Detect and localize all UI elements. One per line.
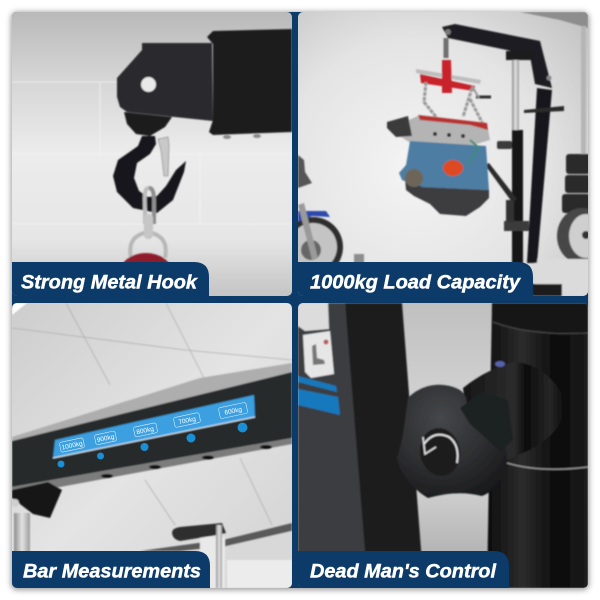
weight markers: 800kg xyxy=(136,426,155,436)
icon: hook and chain xyxy=(444,38,448,58)
icon: lifting chains xyxy=(422,80,484,124)
floor xyxy=(535,259,590,296)
icon: orange cap xyxy=(443,160,463,176)
icon: crane leg base xyxy=(532,284,562,296)
caption: dead man's control: Dead Man's Control xyxy=(310,562,497,582)
weight markers xyxy=(59,402,248,452)
icon: ram cylinder xyxy=(512,130,523,264)
icon: pump knob xyxy=(497,141,512,149)
icon: cross handle xyxy=(524,106,564,113)
weight markers: 900kg xyxy=(96,434,115,444)
icon: knob cap xyxy=(416,425,464,479)
icon: red spreader bar xyxy=(416,69,481,84)
label bar xyxy=(298,551,509,588)
icon: star knob xyxy=(397,385,507,498)
ceiling beam xyxy=(520,12,588,28)
icon: warning stickers xyxy=(298,303,329,331)
icon: latch xyxy=(158,137,169,176)
panel: dead man's control xyxy=(298,303,588,588)
icon: hook xyxy=(113,136,186,213)
icon: blue CE stickers xyxy=(298,376,337,392)
weight markers: 600kg xyxy=(224,406,243,417)
panel: 1000kg load capacity xyxy=(283,12,600,296)
icon: silver post xyxy=(14,513,30,553)
caption: strong metal hook: Strong Metal Hook xyxy=(21,272,198,294)
icon: swivel xyxy=(124,112,172,136)
icon: motorcycle xyxy=(283,217,343,277)
icon: crank handle xyxy=(172,523,226,541)
panel: strong metal hook xyxy=(12,12,292,296)
icon: boom xyxy=(442,24,552,88)
caption: bar measurements: Bar Measurements xyxy=(23,562,201,582)
icon: valve stem xyxy=(463,362,565,460)
panel: bar measurements xyxy=(11,303,292,588)
icon: ram rod xyxy=(512,58,519,130)
blue arrow dots xyxy=(58,422,248,468)
blue measurement label xyxy=(53,395,255,458)
icon: bracket xyxy=(12,482,62,518)
label bar xyxy=(12,262,209,296)
white light patch xyxy=(12,303,27,315)
weight markers: 700kg xyxy=(178,416,197,426)
icon: strut xyxy=(485,163,517,202)
rails and frame xyxy=(140,523,292,551)
icon: crane upright xyxy=(527,88,552,263)
label bar xyxy=(298,262,533,296)
icon: hydraulic post xyxy=(487,303,588,588)
icon: pin hole xyxy=(140,76,156,92)
icon: arm sleeve xyxy=(207,29,292,135)
label bar xyxy=(12,551,210,588)
icon: bar holes xyxy=(101,445,272,478)
weight markers: 1000kg xyxy=(61,440,84,452)
icon: left upright xyxy=(298,303,370,588)
icon: shackle xyxy=(145,188,149,224)
icon: tyre stack xyxy=(562,154,590,213)
icon: engine block xyxy=(398,115,490,146)
icon: measuring beam xyxy=(12,372,292,487)
icon: knob neck xyxy=(460,392,513,452)
bolts xyxy=(223,135,231,139)
caption: 1000kg load capacity: 1000kg Load Capacity xyxy=(310,272,521,294)
icon: inner arm xyxy=(117,43,213,121)
icon: arrow logo xyxy=(424,435,458,463)
icon: red spreader top xyxy=(122,252,170,262)
icon: beam highlight xyxy=(12,363,292,442)
